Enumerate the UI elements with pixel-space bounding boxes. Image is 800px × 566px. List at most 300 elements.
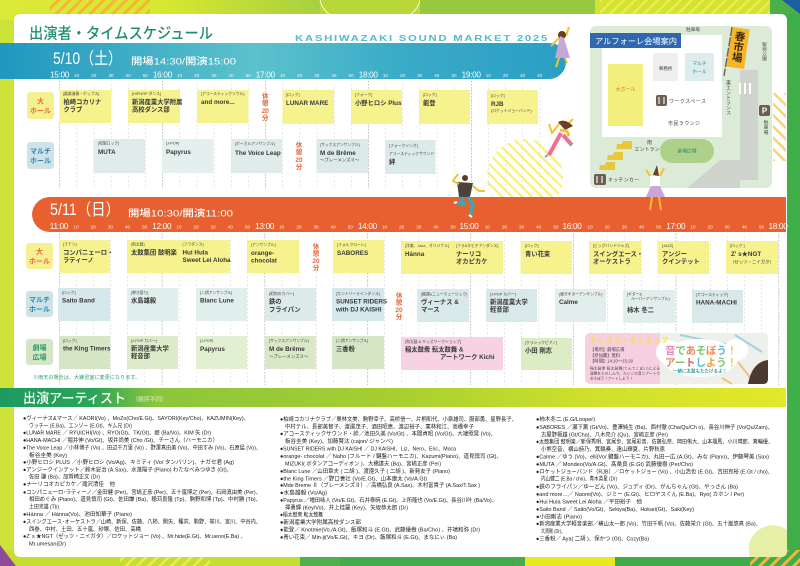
map title: アルフォーレ会場案内: [595, 36, 677, 46]
slot: [ビッグバンドジャズ]: [593, 243, 629, 248]
time axis: day 1: 18:00: [359, 70, 378, 80]
slot: 軽音部: [131, 351, 151, 360]
time axis: day 1: 40: [331, 73, 337, 78]
label: south entrance: [635, 139, 664, 153]
figure: man jumping: [453, 174, 485, 217]
schedule: day 1: [27, 90, 538, 174]
building: [602, 35, 722, 137]
slot: [59, 336, 111, 369]
slot: [419, 90, 470, 124]
time axis: day 2: 40: [742, 224, 747, 230]
slot: [J-POP カバー]: [131, 338, 157, 343]
theatre plaza: 劇場広場: [677, 148, 697, 154]
time axis: day 2: 50: [142, 224, 148, 230]
slot: [洋楽、Jazz、オリジナル]: [405, 243, 449, 248]
time axis: day 1: 40: [434, 73, 440, 78]
slot: MUTA: [98, 149, 116, 156]
artist list: column 3: ●小田剛志 (Piano): [536, 512, 582, 520]
slot: 鉄の: [269, 296, 282, 306]
slot: Hánna: [405, 251, 425, 258]
slot: [ロック]: [525, 243, 539, 248]
slot: [94, 139, 145, 173]
row label: large hall: ホール: [29, 258, 50, 266]
slot: orange-: [251, 250, 274, 257]
slot: フライパン: [269, 306, 301, 314]
time axis: day 2: 30: [211, 224, 216, 230]
time axis: day 1: 15:00: [50, 70, 70, 80]
time axis: day 1: 10: [280, 73, 285, 78]
time axis: day 2: 40: [433, 224, 439, 230]
row label: large hall: 大: [36, 247, 43, 256]
break: 憩: [296, 147, 303, 156]
right edge stripes: [773, 93, 786, 161]
slot: [ロック]: [491, 93, 505, 98]
time axis: day 1: 50: [349, 73, 354, 78]
icon: kitchen car: [594, 174, 639, 185]
slot: [サックスアンサンブル]: [269, 338, 309, 343]
map ground: [590, 26, 772, 188]
break: [312, 242, 320, 272]
artist list: column 2: ●the King Timers ／野口善壮 (Vo/E.Gt)、山本康太 (Vo/A.Gt): [280, 474, 427, 482]
time axis: day 2: 30: [519, 224, 525, 230]
slot: [127, 288, 178, 321]
schedule: day 2: [26, 240, 778, 384]
row label: multi hall: [27, 142, 54, 169]
slot: アコースティックサウンド: [389, 151, 434, 156]
artist list: column 2: 板谷圭美 (Key)、加藤賢汰 (cajon/ ジャンベ): [285, 437, 393, 445]
break: 20: [295, 157, 303, 164]
break: 分: [262, 113, 269, 122]
slot: 新潟産業大学: [490, 297, 528, 306]
time axis: day 1: 10: [383, 73, 388, 78]
time axis: day 1: 17:00: [256, 70, 276, 80]
time axis: day 1: 10: [74, 73, 80, 78]
slot: 青い花束: [525, 249, 551, 258]
artist list: column 3: ●太鼓集団 鼓明楽／新保秀明、宮尾歩、宮尾彩音、佐藤弘奈、岡田侑大、山本颯馬、小川晴郎、箕輪優、: [536, 438, 773, 446]
artists note: （順序不同）: [132, 396, 167, 404]
slot: ルーパーアンサンブル]: [631, 296, 670, 301]
break: 憩: [262, 98, 269, 107]
slot: Saito Band: [62, 298, 95, 304]
artist list: column 3: ●ロケットジョーバンド（RJB）／ロケットジョー (Vo) 、小山浩也 (E.Gt)、吉田克裕 (E.Gt / cho)、: [536, 468, 773, 476]
artist list: column 2: ●Papyrus ／増田咏人 (Vo/E.Gt)、石井泰暁 (E.Gt)、上所隆也 (Vo/E.Gt)、長谷川叶 (Ba/Vo)、: [280, 496, 497, 504]
slot: [385, 140, 436, 174]
time axis: day 1: 20: [91, 73, 97, 78]
slot: 新潟産業大学附属: [132, 97, 182, 106]
slot: コンパニェーロ・: [63, 248, 113, 256]
slot: [128, 90, 182, 123]
slot: [昭和のカバー]: [269, 291, 294, 296]
label: station park: 駅前公園: [762, 42, 768, 62]
artist list: column 1: ●コンパニェーロ･ラティーノ／金田健 (Per)、宮嶋正彦 (Per)、五十嵐博之 (Per)、石岡真由美 (Per)、: [23, 488, 261, 496]
row label: theatre plaza: 広場: [32, 352, 46, 362]
artist list: column 3: 小熊空音、横山詩乃、箕輪奏、遠山輝夏、片野秋恵: [541, 445, 665, 453]
time axis: day 2: 14:00: [358, 222, 378, 231]
break: 20: [262, 108, 269, 115]
workshop details: 演舞をたのしんで、たいこの音とアートで: [590, 370, 660, 376]
break: 休: [296, 140, 303, 149]
artist list: column 3: ●三香粉／ Aya( 二胡 )、保かつ (Gt)、Cozy(Ba): [536, 534, 649, 542]
slot: [ロック]: [62, 290, 76, 295]
slot: [フラダンス]: [182, 242, 204, 246]
artist list: column 3: ●Saito Band ／ Saito(Vo/Gt)、Sekiya(Ba)、Hokari(Gt)、Saki(Key): [536, 506, 694, 513]
slot: LUNAR MARE: [286, 100, 328, 107]
slot: [332, 288, 387, 321]
slot: [127, 336, 178, 369]
time axis: day 2: 50: [656, 224, 662, 230]
slot: [和太鼓 & キッズワークショップ]: [405, 339, 461, 344]
slot: [フォルクローレ]: [337, 242, 366, 247]
artist list: column 1: ●小野ヒロシ PLUS ／小野ヒロシ (Vo/Ag)、キミティ (Vo/ タンバリン)、ナガセ君 (Ag): [23, 458, 234, 466]
photo: [660, 333, 768, 384]
artist list: column 2: ●SUNSET RIDERS with DJ KAISHI ／ DJ KAISHI、Liz、Nero、Eric、Moca: [280, 446, 457, 453]
artist list: column 3: ●Hui Hula Sweet Lei Aloha ／平田裕子 他: [536, 498, 642, 506]
slot: [162, 139, 214, 173]
time axis: day 2: 10: [588, 224, 593, 230]
time axis: day 2: 40: [639, 224, 644, 230]
room: multi hall: ホール: [692, 69, 707, 75]
slot: HANA-MACHI: [696, 300, 737, 306]
brand heading: KASHIWAZAKI SOUND MARKET 2025: [295, 34, 549, 43]
break: 休: [262, 91, 269, 100]
break: 20: [312, 258, 320, 265]
workshop slogan: 音であそぼう！: [665, 344, 737, 357]
date: day 1: 5/10（土）: [53, 49, 122, 68]
artists heading: 出演アーティスト: [23, 390, 126, 406]
artist list: column 2: ●柏崎コカリナクラブ／栗林文美、駒野幸子、高桥信一、片桐和代、小泉雄司、服部勇、星野長子、: [280, 415, 517, 423]
time axis: day 2: 16:00: [562, 222, 582, 231]
icon: kitchen car: キッチンカー: [608, 178, 639, 184]
slot: 絆: [389, 157, 396, 166]
room: large hall: [608, 64, 643, 126]
label: south entrance: エントランス: [635, 147, 664, 153]
time axis: day 1: 20: [503, 73, 508, 78]
row label: large hall: [27, 92, 54, 119]
artist list: column 3: ●SABORES ／瀬下薫 (Gt/Vo)、豊澤純生 (Ba)、西村徹 (Cha/Qu/Ch o)、長谷川伸子 (Vo/Qu/Zam)、: [536, 423, 773, 431]
label: south entrance: 南: [647, 139, 652, 146]
slot: [59, 240, 113, 273]
slot: [フラ&タヒチアンダンス]: [456, 243, 498, 248]
slot: クインテット: [662, 256, 700, 266]
slot: The Voice Leap: [235, 150, 281, 157]
figure: girl running: [545, 119, 573, 157]
time axis: day 2: 10: [74, 224, 79, 230]
icon: parking: [759, 105, 770, 116]
artist list: column 1: Mr.umesan(Dr): [29, 542, 66, 548]
artist list: column 2: ●新潟産業大学附属高校ダンス部: [280, 518, 361, 526]
slot: [265, 288, 316, 321]
artist list: column 3: ●柿木冬二 (E.G/Looper): [536, 415, 595, 423]
break: 休: [313, 242, 320, 250]
pole: [724, 27, 732, 76]
artist list: column 3: 古屋野極雄 (Gt/Cha)、八木亮介 (Qu)、宮嶋正彦 (Per): [541, 430, 668, 438]
row label: multi hall: マルチ: [29, 296, 50, 304]
row label: theatre plaza: 劇場: [32, 343, 46, 352]
slot: [127, 240, 231, 273]
slot: [401, 241, 503, 274]
artist list: column 1: 西巻、中村、土田、五十嵐、砂塚、佐田、高橋: [29, 525, 141, 533]
break: [295, 140, 303, 171]
time axis: day 2: 10: [485, 224, 490, 230]
time axis: day 2: 30: [725, 224, 730, 230]
time axis: day 2: 50: [553, 224, 559, 230]
slot: [555, 289, 606, 322]
slot: [333, 240, 384, 273]
time axis: day 2: 18:00: [768, 222, 788, 231]
slot: 能登: [423, 98, 436, 107]
artist list: column 3: 大渕剛 (Dr)、: [541, 527, 565, 535]
slot: [692, 290, 743, 323]
slot: （ゼッツ・ニイガタ）: [730, 258, 774, 266]
break: 分: [396, 312, 403, 321]
slot: [アンサンブル]: [251, 242, 276, 247]
break: 憩: [396, 298, 403, 306]
slot: オーケストラ: [593, 258, 631, 266]
slot: [282, 90, 334, 124]
slot: Z' s★NGT: [731, 251, 761, 258]
artist list: column 2: ●能登／ Knotmie(Vo./A.Gt)、飯塚和斗 (E.Gt)、武藤優樹 (Ba/Cho) 、井端和弥 (Dr): [280, 526, 480, 534]
icon: cutlery workspace: [656, 95, 706, 106]
break: 分: [296, 162, 303, 171]
slot: [ロック ]: [730, 243, 745, 248]
time axis: day 1: 30: [108, 73, 114, 78]
artist list: column 3: ●and more…／ Naomi(Vo)、ジミー (E.Gt)、ヒロヤスくん (E.Ba)、Ryo( カホン / Per): [536, 491, 744, 498]
room: multi hall: [685, 53, 714, 81]
slot: [521, 338, 572, 370]
break: [395, 290, 403, 321]
slot: [726, 241, 778, 274]
slot: [196, 336, 247, 369]
row label: multi hall: マルチ: [30, 148, 51, 156]
slot: 高校ダンス部: [132, 104, 170, 114]
slot: [401, 337, 503, 370]
time axis: day 2: 40: [536, 224, 542, 230]
slot: [231, 139, 282, 173]
artist list: column 2: ●青い花束／ Min-ji(Vo/E.Gt)、キヨ (Dr)、飯塚和斗 (E.Gt)、まなにぃ (Ba): [280, 533, 457, 541]
slot: 三香粉: [336, 344, 356, 353]
time axis: day 2: 10: [382, 224, 387, 230]
workshop details: 【場所】劇場広場: [590, 346, 625, 353]
slot: [JAZZ]: [662, 244, 673, 248]
room: large hall: 大ホール: [615, 86, 636, 93]
slot: [589, 241, 643, 274]
workshop slogan: 一緒に太鼓もたたけるよ！: [673, 368, 727, 374]
band: day 1: [0, 43, 566, 80]
time axis: day 2: 50: [451, 224, 456, 230]
slot: [フォーク]: [355, 92, 372, 97]
doors: day 2: 開場10:30/開演11:00: [128, 208, 233, 220]
time axis: day 1: 20: [194, 73, 200, 78]
artist list: column 1: ●Hánna ／ Hánna(Vo)、池田知華子 (Piano): [23, 510, 132, 518]
slot: [J-POP]: [200, 339, 213, 343]
road: [740, 70, 758, 180]
artist list: column 1: ●The Voice Leap ／小林博子 (Vo) 、田辺千万里 (Vo) 、野澤真由美 (Vo)、中田すみ (Vo)、石原猛 (Vo)、: [23, 443, 261, 451]
time axis: day 2: 20: [194, 224, 199, 230]
row label: multi hall: [26, 291, 53, 317]
slot: Sweet Lei Aloha: [182, 257, 231, 264]
time axis: day 1: 50: [451, 73, 457, 78]
slot: [弾きギターアンサンブル]: [559, 292, 602, 296]
label: parking top: 駐車場: [686, 26, 700, 33]
workshop details: あそぼう！アートしよう！: [590, 376, 633, 380]
artist list: column 1: [23, 414, 261, 548]
time axis: day 2: 10: [176, 224, 182, 230]
time axis: day 1: 50: [143, 73, 148, 78]
slot: スイングエース・: [593, 249, 643, 258]
slot: [520, 241, 572, 274]
artist list: column 3: [536, 415, 773, 542]
slot: [器楽演奏・ポップス]: [63, 91, 99, 96]
slot: ヴィーナス &: [421, 297, 459, 306]
slot: 柿木 冬二: [627, 305, 654, 314]
icon: parking: P: [762, 106, 768, 116]
time axis: day 2: 50: [245, 224, 250, 230]
time axis: day 1: 30: [520, 73, 526, 78]
slot: (ロケットジョーバンド): [491, 108, 532, 113]
decorative stripe circle: [487, 139, 563, 197]
artist list: column 2: 中村テル、長部美智子、渡邉茂子、酒田昭恵、渡辺裕子、栗林和江、高橋幸子: [285, 422, 474, 430]
slot: [ロック]: [423, 92, 437, 97]
time axis: day 1: [50, 70, 543, 80]
slot: Papyrus: [166, 149, 191, 156]
time axis: day 2: 15:00: [460, 222, 479, 231]
artist list: column 1: ●アンジークインテット／鈴木安治 (A.Sax)、水落陽子 (Piano) わたなべみつゆき (Gt)、: [23, 465, 232, 473]
time axis: day 1: 20: [400, 73, 405, 78]
slot: chocolat: [251, 258, 278, 264]
slot: [アコースティックソウル]: [201, 91, 244, 96]
slot: [開運&ニューミュージック]: [421, 292, 467, 296]
slot: [ギター&: [627, 292, 642, 296]
theatre plaza: [660, 139, 714, 163]
workshop details: 【参加費】無料: [590, 352, 621, 359]
artist list: column 2: [280, 415, 517, 541]
slot: M de Brême: [320, 150, 356, 157]
room: office: 事務所: [659, 65, 673, 72]
slot: 新潟産業大学: [131, 344, 169, 352]
workshop heading: キッズワークショップ: [590, 336, 668, 344]
band: day 2: [32, 197, 788, 232]
slot: [60, 90, 112, 123]
time axis: day 1: 10: [177, 73, 183, 78]
label: lounge: 市民ラウンジ: [668, 120, 700, 127]
slot: Papyrus: [200, 346, 225, 353]
break: [262, 91, 269, 122]
slot: with DJ KAISHI: [335, 306, 382, 314]
title: 出演者・タイムスケジュール: [29, 26, 213, 42]
slot: オカピカケ: [456, 258, 487, 266]
slot: アンジー: [662, 250, 687, 258]
artist list: column 2: ●稲太鼓衆 転太鼓舞: [280, 511, 323, 519]
slot: [58, 288, 110, 321]
slot: 太鼓集団 鼓明楽: [131, 248, 178, 256]
banner: art market: [726, 27, 750, 69]
slot: Blanc Lune: [200, 298, 234, 304]
time axis: day 2: 12:00: [152, 222, 172, 231]
artist list: column 1: ●ヴィーナス&マース／ KAORI(Vo) 、MoZo(Cho/E.Gt)、SAYORI(Key/Cho)、KAZUMIN(Key)、: [23, 414, 249, 422]
artist list: column 1: 土田克雄 (Tb): [29, 503, 59, 511]
slot: [197, 90, 248, 123]
time axis: day 2: 13:00: [255, 222, 275, 231]
slot: ナーリコ: [456, 250, 481, 258]
slot: M de Brême: [269, 346, 305, 353]
slot: RJB: [491, 101, 504, 108]
slot: [J-POP]: [166, 142, 179, 146]
slot: [196, 288, 247, 321]
slot: 小田 剛志: [525, 346, 553, 354]
row label: multi hall: ホール: [30, 157, 51, 165]
artist list: column 2: ●アコースティックサウンド・絆／池田久美 (Vo/Gt) 、本間貞昭 (Vo/Gt)、大端照晃 (Vo)、: [280, 430, 496, 438]
slot: [フォークソング]: [389, 143, 418, 148]
slot: [486, 289, 537, 322]
slot: [623, 290, 675, 323]
slot: クラブ: [64, 104, 83, 114]
slot: [ロック]: [286, 92, 300, 97]
artist list: column 3: ●新潟産業大学軽音楽部／横山太一郎 (Vo)、竹田千帆 (Vo)、佐藤栄介 (Gt)、五十嵐悠真 (Ba)、: [536, 520, 761, 528]
room: multi hall: マルチ: [692, 61, 707, 67]
row label: large hall: 大: [37, 96, 44, 106]
time axis: day 2: 20: [708, 224, 713, 230]
cloud: [656, 339, 748, 377]
time axis: day 2: 40: [228, 224, 233, 230]
slot: アートワーク Kichi: [440, 352, 495, 361]
time axis: day 1: 50: [246, 73, 251, 78]
slot: [332, 336, 384, 369]
time axis: day 1: 40: [228, 73, 234, 78]
slot: [417, 289, 469, 322]
slot: [658, 241, 709, 274]
slot: Calme: [559, 299, 578, 306]
slot: [316, 139, 368, 173]
time axis: day 2: 50: [759, 224, 764, 230]
time axis: day 1: 30: [417, 73, 423, 78]
time axis: day 1: 40: [537, 73, 543, 78]
panel: kids workshop: [585, 333, 768, 384]
time axis: day 2: 20: [91, 224, 96, 230]
time axis: day 1: 10: [486, 73, 491, 78]
time axis: day 2: 30: [622, 224, 627, 230]
artist list: column 3: ●Calme ／ゆう (Vo)、elli(Vo/ 鍵盤ハーモニカ)、丸田一広 (A.Gt)、みな (Piano)、伊藤琴美 (Sax): [536, 452, 769, 460]
break: 分: [313, 263, 320, 272]
map: venue guide: [590, 26, 772, 188]
slot: [247, 240, 299, 273]
time axis: day 1: 16:00: [153, 70, 173, 80]
grid: day 2: [58, 233, 780, 385]
slot: 小野ヒロシ Plus: [355, 98, 402, 107]
artist list: column 3: 内山健二 (E.Ba / cho)、青木英星 (Dr): [541, 475, 617, 483]
lower corner circle: [749, 525, 787, 557]
note: rain: ※雨天の場合は、大練習室に変更になります。: [33, 374, 140, 381]
time axis: day 2: 20: [296, 224, 302, 230]
slot: [二胡アンサンブル]: [200, 290, 232, 295]
slot: 稲太鼓衆 転太鼓舞 &: [405, 344, 464, 354]
artist list: column 1: ●ナーリコオカピカケ／滝沢清佳 他: [23, 480, 115, 488]
time axis: day 2: 30: [313, 224, 319, 230]
row label: multi hall: ホール: [29, 306, 50, 314]
artist list: column 2: ●Mde Breme Ⅱ（ブレーメンズⅡ）／高橋弘良 (A.Sax)、木村富貴子 (A.Sax/T.Sax ): [280, 481, 480, 489]
slot: [ボーカルアンサンブル]: [235, 141, 275, 146]
label: parking right: 駐車場: [762, 119, 768, 136]
time axis: day 2: 10: [690, 224, 696, 230]
band: artists: [0, 388, 786, 407]
slot: [二胡アンサンブル]: [336, 338, 368, 343]
artist list: column 2: ●Blanc Lune ／山田章夫 ( 二胡 )、渡邉久子 ( 二胡 )、新発友子 (Piano): [280, 467, 450, 475]
time axis: day 1: 20: [297, 73, 303, 78]
artist list: column 2: ●水島雄毅 (Vo/Ag): [280, 488, 327, 496]
artist list: column 3: ●MUTA ／ Mondeo(Vo/A.Gt)、髙桑良 (E.Gt) 武藤優樹 (Per/Cho): [536, 460, 693, 468]
slot: and more...: [201, 99, 235, 106]
doors: day 1: 開場14:30/開演15:00: [131, 56, 236, 68]
artist list: column 1: ウッチー (E.Ba)、エンゾー (E.Gt)、キム兄 (Dr): [29, 421, 132, 429]
